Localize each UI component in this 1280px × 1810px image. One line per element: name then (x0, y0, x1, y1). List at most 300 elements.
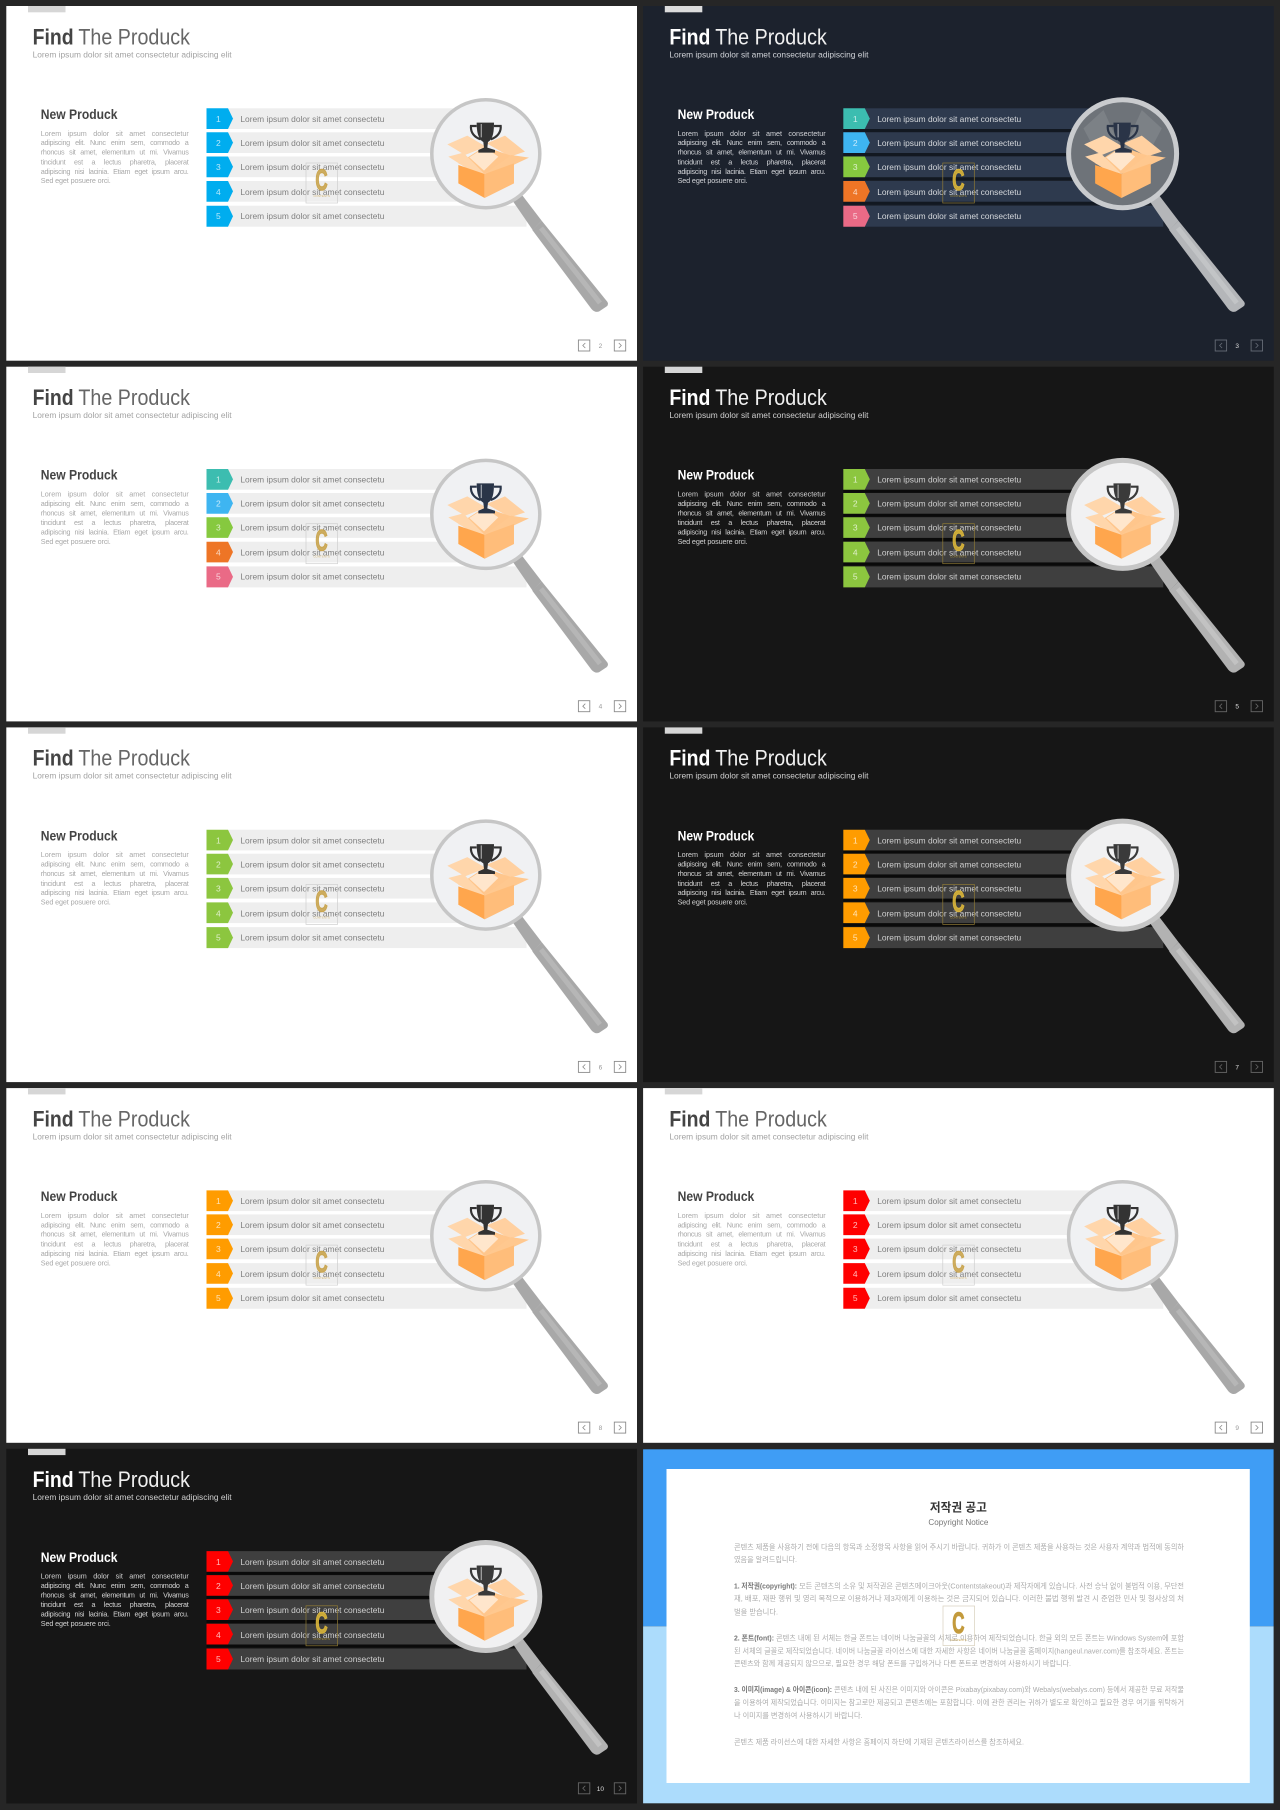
watermark: C (952, 886, 964, 919)
list row 3: Lorem ipsum dolor sit amet consectetu (877, 1244, 1021, 1254)
list row 3: 3 (853, 883, 858, 893)
watermark: CONTENTS (950, 915, 967, 919)
title: Find (669, 1106, 710, 1131)
list row 2 (843, 854, 1117, 877)
list row 4: Lorem ipsum dolor sit amet consectetu (877, 187, 1021, 197)
list row 5: Lorem ipsum dolor sit amet consectetu (240, 211, 385, 221)
list row 2 (206, 132, 480, 156)
list row 3: 3 (853, 523, 858, 533)
slide 8: white, orange list (6, 1088, 637, 1443)
paragraph: Sed eget posuere orci. (678, 176, 748, 185)
section 3 text: 3. 이미지(image) & 아이콘(icon): (734, 1684, 832, 1694)
page navigation: 7 (1235, 1064, 1239, 1071)
title (33, 1467, 191, 1492)
paragraph: Lorem ipsum dolor sit amet consectetur (678, 129, 826, 138)
paragraph (41, 1211, 189, 1267)
list row 3: 3 (216, 1244, 221, 1254)
list row 2: Lorem ipsum dolor sit amet consectetu (240, 499, 385, 509)
list row 5 (206, 927, 526, 948)
list row 4 (206, 1263, 480, 1287)
list row 1 (206, 108, 480, 132)
slide background (643, 727, 1274, 1082)
watermark (306, 163, 338, 203)
section 1 text: 벌을 받습니다. (734, 1606, 778, 1616)
list row 5: Lorem ipsum dolor sit amet consectetu (877, 211, 1021, 221)
list row 1 (843, 1190, 1117, 1214)
paragraph: tincidunt est a lectus pharetra, placerat (41, 879, 189, 888)
list row 1 (206, 469, 480, 493)
title: Find (33, 746, 74, 771)
list row 5 (843, 566, 1163, 587)
section 3 text: 을 이용하여 제작되었습니다. 이미지는 참고로만 제공되고 콘텐츠에는 포함합니다. 이에 관한 권리는 귀하가 별도로 확인하고 필요한 경우 여기를 위탁하거 (734, 1697, 1184, 1707)
list row 1 (843, 830, 1117, 853)
paragraph: Sed eget posuere orci. (41, 1619, 111, 1628)
watermark (306, 1606, 338, 1646)
slide 4: white, multicolour list (6, 367, 637, 721)
paragraph: rhoncus sit amet, elementum ut mi. Vivamus (678, 1230, 826, 1239)
paragraph (41, 1572, 189, 1628)
list row 4: 4 (216, 908, 221, 918)
list row 1: 1 (216, 835, 221, 845)
list row 4 (843, 181, 1117, 205)
list row 2: Lorem ipsum dolor sit amet consectetu (240, 1220, 385, 1230)
slide background (6, 367, 637, 721)
list row 3: Lorem ipsum dolor sit amet consectetu (240, 883, 385, 893)
page navigation: 5 (1235, 704, 1239, 711)
page navigation (578, 1422, 626, 1433)
title (669, 1106, 828, 1131)
heading: New Produck (41, 107, 118, 122)
list row 1 (206, 1190, 480, 1214)
list row 1: Lorem ipsum dolor sit amet consectetu (240, 1557, 385, 1567)
slide 5: black, green list (643, 367, 1274, 721)
list row 3 (206, 1599, 480, 1623)
list row 3: Lorem ipsum dolor sit amet consectetu (240, 1244, 385, 1254)
title: The Produck (715, 24, 828, 49)
list row 4: Lorem ipsum dolor sit amet consectetu (240, 908, 385, 918)
paragraph: adipiscing elit. Nunc enim sem, commodo a (41, 499, 189, 508)
list row 5: 5 (216, 211, 221, 221)
list row 5 (206, 206, 526, 227)
list row 5: 5 (853, 1293, 858, 1303)
list row 1: 1 (216, 1196, 221, 1206)
list row 4 (206, 542, 480, 565)
list row 2: Lorem ipsum dolor sit amet consectetu (240, 138, 385, 148)
page navigation: 4 (599, 704, 603, 711)
section 2 text: 콘텐츠 내에 된 서체는 한글 폰트는 네이버 나눔글꼴의 서체로 이용하여 제작되었습니다. 한글 외의 모든 폰트는 Windows System에 포함 (776, 1632, 1184, 1642)
list row 2 (843, 493, 1117, 517)
watermark: CONTENTS (313, 1637, 330, 1641)
list row 5: 5 (216, 1293, 221, 1303)
list row 4: Lorem ipsum dolor sit amet consectetu (240, 187, 385, 197)
top tab (665, 727, 702, 734)
top tab (665, 1088, 702, 1094)
section 3 text: 나 이미지를 변경하여 사용하시기 바랍니다. (734, 1710, 863, 1720)
intro text: 였음을 알려드립니다. (734, 1554, 797, 1564)
list row 5: 5 (853, 211, 858, 221)
list row 5: Lorem ipsum dolor sit amet consectetu (240, 932, 385, 942)
page navigation: 8 (599, 1425, 603, 1432)
page navigation: 9 (1235, 1425, 1239, 1432)
paragraph: adipiscing elit. Nunc enim sem, commodo a (678, 1220, 826, 1229)
list row 2: Lorem ipsum dolor sit amet consectetu (877, 859, 1021, 869)
top tab (28, 727, 66, 734)
list row 2: 2 (853, 499, 858, 509)
title: Find (33, 1106, 74, 1131)
list row 1: 1 (853, 1196, 858, 1206)
subtitle: Lorem ipsum dolor sit amet consectetur adipiscing elit (33, 410, 232, 420)
list row 5: Lorem ipsum dolor sit amet consectetu (877, 1293, 1021, 1303)
list row 4: Lorem ipsum dolor sit amet consectetu (877, 1269, 1021, 1279)
list row 2 (206, 1575, 480, 1599)
background lower light blue band (643, 1626, 1274, 1803)
list row 2: 2 (216, 499, 221, 509)
slide background (6, 6, 637, 361)
paragraph: rhoncus sit amet, elementum ut mi. Vivamus (41, 508, 189, 517)
watermark: C (315, 1607, 328, 1640)
list row 3 (843, 878, 1117, 902)
list row 3: Lorem ipsum dolor sit amet consectetu (240, 162, 385, 172)
watermark: C (952, 1246, 964, 1279)
list row 3 (843, 517, 1117, 541)
title: The Produck (78, 1106, 191, 1131)
list row 2 (843, 1214, 1117, 1238)
list row 2 (206, 1214, 480, 1238)
title: The Produck (78, 1467, 191, 1492)
paragraph: tincidunt est a lectus pharetra, placerat (678, 879, 826, 888)
icon: magnifier with box and trophy (432, 100, 608, 312)
paragraph: Lorem ipsum dolor sit amet consectetur (41, 129, 189, 138)
list row 3: Lorem ipsum dolor sit amet consectetu (877, 883, 1021, 893)
list row 5: 5 (853, 932, 858, 942)
paragraph: Sed eget posuere orci. (41, 176, 111, 185)
list row 2 (843, 132, 1117, 156)
watermark: CONTENTS (313, 1276, 330, 1280)
list row 5: 5 (216, 572, 221, 582)
list row 4 (843, 1263, 1117, 1287)
paragraph: rhoncus sit amet, elementum ut mi. Vivamus (41, 1590, 189, 1599)
section 3 text (734, 1684, 1184, 1720)
list row 4: 4 (853, 187, 858, 197)
page navigation (1215, 701, 1262, 712)
list row 1: 1 (216, 114, 221, 124)
title: The Produck (715, 385, 828, 410)
paragraph: adipiscing elit. Nunc enim sem, commodo a (41, 1220, 189, 1229)
list row 5: Lorem ipsum dolor sit amet consectetu (877, 932, 1021, 942)
page navigation (578, 1783, 626, 1794)
list row 4 (843, 542, 1117, 565)
closing text: 콘텐츠 제품 라이선스에 대한 자세한 사항은 홈페이지 하단에 기재된 콘텐츠라이선스를 참조하세요. (734, 1736, 1024, 1746)
list row 3: Lorem ipsum dolor sit amet consectetu (877, 523, 1021, 533)
intro text: 콘텐츠 제품을 사용하기 전에 다음의 항목과 소정항목 사항을 읽어 주시기 바랍니다. 귀하가 이 콘텐츠 제품을 사용하는 것은 사용자 계약과 법적에 동의하 (734, 1541, 1184, 1551)
subtitle: Lorem ipsum dolor sit amet consectetur adipiscing elit (669, 771, 869, 781)
paragraph: tincidunt est a lectus pharetra, placerat (41, 157, 189, 166)
paragraph: adipiscing elit. Nunc enim sem, commodo a (678, 499, 826, 508)
paragraph: tincidunt est a lectus pharetra, placerat (41, 1600, 189, 1609)
paragraph: Lorem ipsum dolor sit amet consectetur (41, 490, 189, 499)
list row 1: Lorem ipsum dolor sit amet consectetu (240, 475, 385, 485)
list row 4: Lorem ipsum dolor sit amet consectetu (240, 1630, 385, 1640)
paragraph: adipiscing elit. Nunc enim sem, commodo a (41, 860, 189, 869)
list row 5: 5 (216, 1654, 221, 1664)
list row 4: 4 (853, 908, 858, 918)
title (33, 385, 191, 410)
list row 1 (206, 830, 480, 853)
page navigation (1215, 1061, 1262, 1072)
top tab (28, 6, 66, 12)
paragraph: adipiscing nisi lacinia. Etiam eget ipsum arcu. (678, 888, 826, 897)
list row 5: 5 (216, 932, 221, 942)
slide 10: black, red list (6, 1449, 637, 1804)
notice subtitle: Copyright Notice (928, 1517, 989, 1527)
title: Find (33, 1467, 74, 1492)
section 1 text: 1. 저작권(copyright): (734, 1580, 797, 1590)
heading: New Produck (41, 828, 118, 843)
list row 1: Lorem ipsum dolor sit amet consectetu (877, 475, 1021, 485)
list row 5 (843, 206, 1163, 227)
list row 1: 1 (216, 475, 221, 485)
list row 5 (206, 1648, 526, 1670)
title (669, 24, 828, 49)
watermark (943, 1245, 974, 1285)
title: Find (669, 24, 710, 49)
icon: magnifier with box and trophy (432, 1182, 608, 1394)
paragraph (41, 129, 189, 185)
paragraph: adipiscing nisi lacinia. Etiam eget ipsum arcu. (678, 1249, 826, 1258)
page navigation (1215, 340, 1262, 351)
list row 3 (206, 517, 480, 541)
list row 5 (206, 1288, 526, 1309)
paragraph: adipiscing elit. Nunc enim sem, commodo a (678, 860, 826, 869)
watermark: C (315, 886, 328, 919)
list row 4: 4 (216, 548, 221, 558)
paragraph: Lorem ipsum dolor sit amet consectetur (41, 1572, 189, 1581)
section 2 text: 콘텐츠와 함께 제공되지 않으므로, 필요한 경우 해당 폰트를 구입하거나 다른 폰트로 변경하여 사용하시기 바랍니다. (734, 1658, 1071, 1668)
paragraph: Sed eget posuere orci. (41, 1258, 111, 1267)
watermark: C (952, 164, 964, 197)
title: Find (669, 746, 710, 771)
paragraph: adipiscing nisi lacinia. Etiam eget ipsum arcu. (41, 1249, 189, 1258)
paragraph: adipiscing nisi lacinia. Etiam eget ipsum arcu. (41, 1610, 189, 1619)
slide background (643, 6, 1274, 361)
subtitle: Lorem ipsum dolor sit amet consectetur adipiscing elit (33, 1492, 232, 1502)
slide background (643, 367, 1274, 721)
slide background (6, 1088, 637, 1443)
title: The Produck (78, 24, 191, 49)
heading: New Produck (678, 468, 755, 483)
list row 2: 2 (853, 138, 858, 148)
list row 2: Lorem ipsum dolor sit amet consectetu (877, 499, 1021, 509)
page navigation (578, 340, 626, 351)
list row 1 (843, 469, 1117, 493)
paragraph: Sed eget posuere orci. (678, 537, 748, 546)
watermark: CONTENTS (313, 915, 330, 919)
slide background (643, 1088, 1274, 1443)
list row 4 (206, 181, 480, 205)
paragraph: tincidunt est a lectus pharetra, placerat (41, 518, 189, 527)
list row 1: Lorem ipsum dolor sit amet consectetu (877, 1196, 1021, 1206)
watermark (943, 884, 974, 924)
section 1 text: 재, 배포, 재판 행위 및 영리 목적으로 이용하거나 제3자에게 이용하는 것은 금지되어 있습니다. 이러한 불법 행위 발견 시 준엄한 민사 및 형사상의 처 (734, 1593, 1184, 1603)
title (33, 24, 191, 49)
icon: magnifier with box and trophy (1069, 460, 1245, 673)
list row 4: 4 (216, 187, 221, 197)
title (33, 1106, 191, 1131)
list row 3: 3 (216, 162, 221, 172)
paragraph: Lorem ipsum dolor sit amet consectetur (678, 490, 826, 499)
paragraph: Lorem ipsum dolor sit amet consectetur (41, 1211, 189, 1220)
list row 3: 3 (216, 1605, 221, 1615)
list row 3: Lorem ipsum dolor sit amet consectetu (240, 1605, 385, 1615)
watermark: CONTENTS (313, 194, 330, 198)
page navigation (578, 701, 626, 712)
list row 2: 2 (216, 859, 221, 869)
watermark: C (315, 164, 328, 197)
list row 1: 1 (853, 475, 858, 485)
list row 5: Lorem ipsum dolor sit amet consectetu (240, 1654, 385, 1664)
heading: New Produck (41, 1550, 118, 1565)
list row 3 (206, 156, 480, 180)
paragraph (41, 850, 189, 907)
watermark: CONTENTS (950, 555, 967, 559)
page navigation: 2 (599, 343, 603, 350)
subtitle: Lorem ipsum dolor sit amet consectetur adipiscing elit (33, 1131, 232, 1141)
section 3 text: 콘텐츠 내에 된 사진은 이미지와 아이콘은 Pixabay(pixabay.com)와 Webalys(webalys.com) 등에서 제공한 무료 저작물 (834, 1684, 1184, 1694)
icon: magnifier with box and trophy (432, 1542, 608, 1755)
page navigation (1215, 1422, 1262, 1433)
list row 1 (206, 1551, 480, 1575)
watermark: CONTENTS (313, 555, 330, 559)
heading: New Produck (41, 1189, 118, 1204)
watermark (306, 1245, 338, 1285)
list row 4 (206, 902, 480, 926)
slide background (6, 727, 637, 1082)
section 2 text: 2. 폰트(font): (734, 1633, 774, 1642)
subtitle: Lorem ipsum dolor sit amet consectetur adipiscing elit (669, 49, 869, 59)
list row 3: Lorem ipsum dolor sit amet consectetu (877, 162, 1021, 172)
slide 2: white, blue list (6, 6, 637, 361)
list row 4: 4 (216, 1630, 221, 1640)
paragraph: adipiscing nisi lacinia. Etiam eget ipsum arcu. (41, 528, 189, 537)
watermark: C (952, 525, 964, 558)
list row 1: 1 (853, 835, 858, 845)
list row 3: 3 (216, 523, 221, 533)
list row 5: Lorem ipsum dolor sit amet consectetu (877, 572, 1021, 582)
list row 3 (843, 1239, 1117, 1262)
subtitle: Lorem ipsum dolor sit amet consectetur adipiscing elit (669, 1131, 869, 1141)
list row 4: 4 (853, 1269, 858, 1279)
top tab (28, 367, 66, 373)
subtitle: Lorem ipsum dolor sit amet consectetur adipiscing elit (33, 771, 232, 781)
paragraph: Sed eget posuere orci. (678, 1258, 748, 1267)
list row 5: 5 (853, 572, 858, 582)
watermark: C (952, 1607, 965, 1640)
list row 2: 2 (853, 859, 858, 869)
background upper blue band (643, 1449, 1274, 1626)
slide 7: black, orange list (643, 727, 1274, 1082)
title: The Produck (78, 385, 191, 410)
paragraph: adipiscing nisi lacinia. Etiam eget ipsum arcu. (41, 167, 189, 176)
notice title: 저작권 공고 (930, 1500, 987, 1514)
list row 5 (206, 566, 526, 587)
title: The Produck (715, 1106, 828, 1131)
icon: magnifier with box and trophy (432, 821, 608, 1033)
watermark (306, 524, 338, 564)
page navigation: 10 (597, 1786, 604, 1793)
paragraph: adipiscing nisi lacinia. Etiam eget ipsum arcu. (41, 888, 189, 897)
paragraph (678, 490, 826, 546)
list row 3: Lorem ipsum dolor sit amet consectetu (240, 523, 385, 533)
list row 2: Lorem ipsum dolor sit amet consectetu (877, 1220, 1021, 1230)
page navigation: 6 (599, 1064, 603, 1071)
list row 1: 1 (216, 1557, 221, 1567)
title: Find (669, 385, 710, 410)
title: The Produck (78, 746, 191, 771)
top tab (28, 1088, 66, 1094)
paragraph: Lorem ipsum dolor sit amet consectetur (41, 850, 189, 859)
list row 1: Lorem ipsum dolor sit amet consectetu (240, 835, 385, 845)
list row 2 (206, 493, 480, 517)
page navigation (578, 1061, 626, 1072)
list row 4: 4 (853, 548, 858, 558)
top tab (665, 6, 702, 12)
watermark (943, 1606, 975, 1646)
list row 5 (843, 927, 1163, 948)
title: The Produck (715, 746, 828, 771)
watermark: C (315, 525, 328, 558)
paragraph (678, 1211, 826, 1267)
watermark (943, 524, 974, 564)
list row 3 (206, 1239, 480, 1262)
heading: New Produck (678, 828, 755, 843)
list row 4 (206, 1624, 480, 1648)
watermark (943, 163, 974, 203)
icon: magnifier with box and trophy (432, 460, 608, 673)
paragraph: rhoncus sit amet, elementum ut mi. Vivamus (678, 869, 826, 878)
paragraph: rhoncus sit amet, elementum ut mi. Vivamus (41, 869, 189, 878)
list row 2: 2 (216, 1220, 221, 1230)
paragraph: Sed eget posuere orci. (678, 898, 748, 907)
watermark: C (315, 1246, 328, 1279)
white notice card (666, 1469, 1250, 1783)
section 2 text (734, 1632, 1184, 1668)
heading: New Produck (41, 468, 118, 483)
top tab (28, 1449, 66, 1455)
paragraph: adipiscing elit. Nunc enim sem, commodo a (41, 1581, 189, 1590)
icon: magnifier with box and trophy (1069, 821, 1245, 1033)
list row 2: Lorem ipsum dolor sit amet consectetu (240, 859, 385, 869)
section 1 text: 모든 콘텐츠의 소유 및 저작권은 콘텐츠메이크아웃(Contentstakeout)과 제작자에게 있습니다. 사전 승낙 없이 불법적 이용, 무단전 (799, 1580, 1184, 1590)
paragraph: adipiscing nisi lacinia. Etiam eget ipsum arcu. (678, 528, 826, 537)
list row 4: Lorem ipsum dolor sit amet consectetu (240, 548, 385, 558)
heading: New Produck (678, 1189, 755, 1204)
list row 3 (843, 156, 1117, 180)
paragraph (678, 129, 826, 185)
paragraph (678, 850, 826, 907)
section 1 text (734, 1580, 1184, 1616)
watermark: CONTENTS (950, 194, 967, 198)
list row 3: 3 (216, 883, 221, 893)
intro text (734, 1541, 1184, 1564)
title: Find (33, 24, 74, 49)
list row 4: 4 (216, 1269, 221, 1279)
paragraph: rhoncus sit amet, elementum ut mi. Vivamus (41, 148, 189, 157)
slide background (6, 1449, 637, 1804)
subtitle: Lorem ipsum dolor sit amet consectetur adipiscing elit (33, 49, 232, 59)
list row 2: 2 (216, 138, 221, 148)
paragraph (41, 490, 189, 546)
list row 1: Lorem ipsum dolor sit amet consectetu (240, 1196, 385, 1206)
